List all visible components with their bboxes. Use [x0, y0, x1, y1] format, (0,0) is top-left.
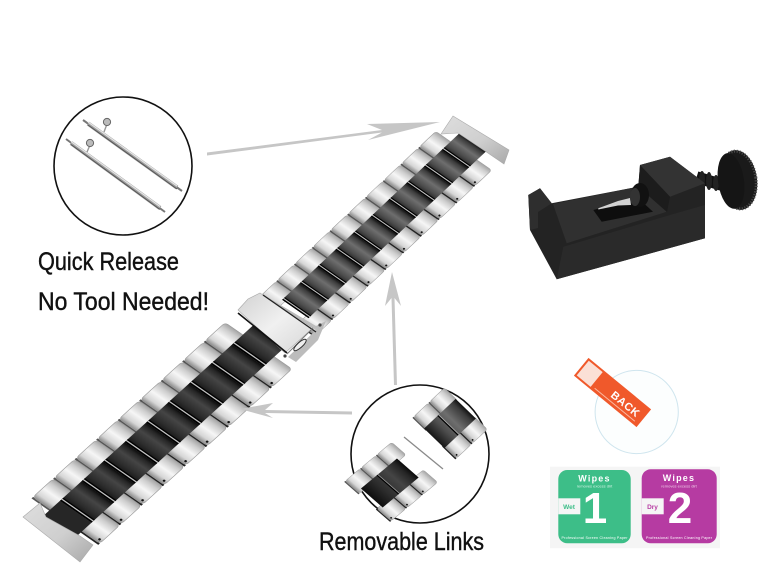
- wipe 1 wet: 1: [583, 484, 607, 533]
- top end piece: [441, 116, 509, 164]
- tool front face: [557, 205, 705, 279]
- tool jaw: [528, 188, 552, 230]
- bottom end piece: [23, 503, 93, 562]
- label: no tool needed: No Tool Needed!: [38, 288, 209, 316]
- band upper section: [258, 123, 501, 337]
- wipe 1 wet: removes excess dirt: [577, 484, 613, 488]
- tool pin: [598, 198, 631, 210]
- wipe 2 dry: Wipes: [663, 473, 695, 483]
- tool body: [528, 157, 705, 279]
- wipe 2 dry: Dry: [647, 504, 658, 511]
- link removal tool: [528, 148, 758, 279]
- wipes packets: [550, 467, 720, 548]
- clasp: [238, 293, 326, 362]
- circle: quick release pins: [54, 97, 192, 235]
- wipe 2 dry: [642, 469, 717, 543]
- label: quick release: Quick Release: [38, 248, 179, 276]
- wipe 1 wet: Wipes: [578, 474, 611, 484]
- pin two: [66, 139, 165, 212]
- label: removable links: Removable Links: [319, 528, 484, 556]
- tool block left face: [638, 165, 670, 212]
- arrow up to band middle: [385, 272, 401, 385]
- arrow left to band lower: [240, 403, 352, 418]
- tool knob and screw: [695, 148, 758, 212]
- wipe 2 dry: Professional Screen Cleaning Paper: [646, 536, 713, 540]
- wipe 1 wet: Professional Screen Cleaning Paper: [562, 536, 628, 540]
- tool collar: [630, 183, 649, 207]
- wipe 2 dry: 2: [668, 484, 692, 533]
- watch band: [23, 116, 509, 562]
- removed link lower left: [344, 442, 438, 522]
- orange peel tab: BACK: [608, 389, 642, 420]
- circle: removable links: [344, 385, 489, 523]
- link pin: [404, 437, 443, 469]
- tool tray surface: [553, 187, 667, 243]
- wipe 1 wet: [558, 470, 631, 543]
- tool block top: [640, 157, 705, 197]
- wipe 1 wet: Wet: [563, 504, 576, 511]
- removed link upper right: [412, 388, 487, 459]
- band lower section: [26, 313, 303, 550]
- tool slot: [593, 198, 653, 222]
- pin one: [83, 118, 182, 191]
- wipe 2 dry: removes excess dirt: [661, 484, 698, 488]
- arrow to band top: [207, 122, 440, 156]
- glass screen protector: [574, 358, 678, 454]
